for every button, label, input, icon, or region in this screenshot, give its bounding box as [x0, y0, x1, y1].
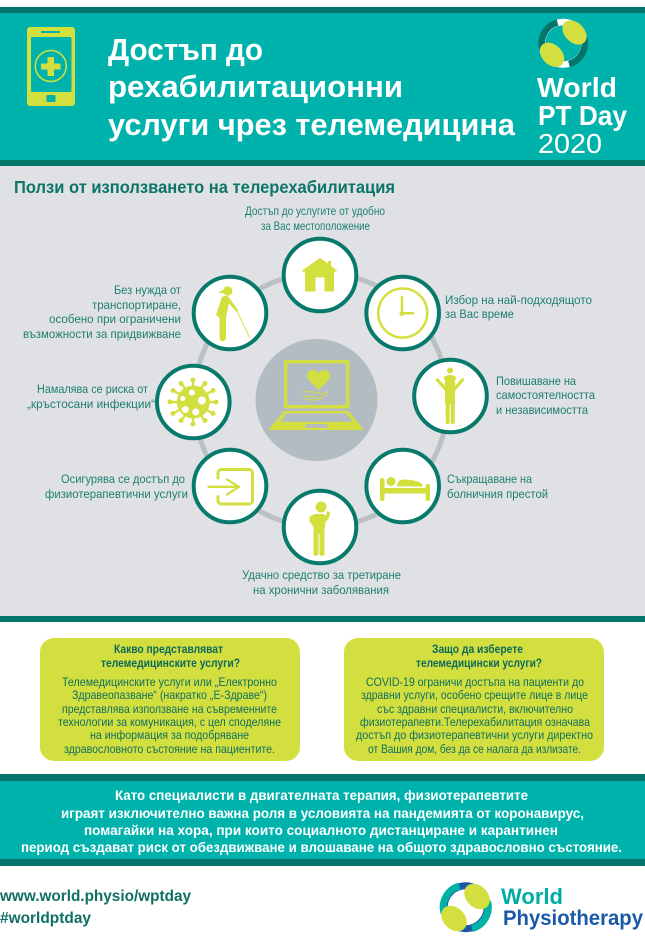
label: accessible location: Достъп до услугите от удобно: [245, 204, 385, 218]
callout: what are telehealth services: [40, 638, 300, 761]
banner: role of physiotherapists: [0, 774, 645, 866]
callout: what are telehealth services: на информация за подобряване: [90, 728, 249, 742]
label: access to physiotherapy: физиотерапевтични услуги: [45, 487, 188, 501]
label: no transport: възможности за придвижване: [23, 327, 181, 341]
icon circle: parent carrying child: [414, 360, 487, 432]
logo: World PT Day 2020: World: [537, 72, 617, 103]
title: услуги чрез телемедицина: [108, 107, 516, 142]
callout: why choose telehealth services: здравни услуги, особено срещите лице в лице: [361, 688, 588, 702]
connecting ring: [194, 273, 448, 527]
callout: why choose telehealth services: физиотерапевти.Телерехабилитация означава: [360, 715, 590, 729]
callout: why choose telehealth services: COVID-19 ограничи достъпа на пациенти до: [366, 675, 584, 689]
logo: World PT Day 2020: PT Day: [538, 100, 627, 131]
header band: [0, 7, 645, 166]
label: shorter hospital stay: [447, 472, 548, 501]
callout: what are telehealth services: Здравеопазване“ (накратко „Е-Здраве“): [72, 688, 267, 702]
icon circle: person thinking: [284, 491, 356, 563]
label: no transport: Без нужда от: [114, 283, 181, 297]
callout: why choose telehealth services: достъп до физиотерапевтични услуги директно: [356, 728, 593, 742]
label: no transport: транспортиране,: [92, 298, 181, 312]
banner: role of physiotherapists: Като специалисти в двигателната терапия, физиотерапевтите: [115, 788, 528, 803]
callout: what are telehealth services: Телемедицинските услуги или „Електронно: [62, 675, 277, 689]
label: best time: Избор на най-подходящото: [445, 293, 592, 307]
logo: World Physiotherapy: World: [501, 884, 563, 909]
icon: laptop with heart in hand: [256, 339, 378, 461]
footer links: [0, 888, 191, 927]
callout: what are telehealth services: Какво представляват: [114, 642, 223, 656]
icon circle: home: [284, 239, 356, 311]
logo: World Physiotherapy: Physiotherapy: [503, 907, 643, 930]
footer links: #worldptday: [0, 910, 91, 927]
logo: World PT Day 2020: [535, 16, 627, 159]
callout: what are telehealth services: телемедицинските услуги?: [101, 656, 240, 670]
label: best time: [445, 293, 592, 321]
label: accessible location: [245, 204, 385, 233]
label: shorter hospital stay: болничния престой: [447, 487, 548, 501]
label: chronic conditions: Удачно средство за третиране: [242, 568, 401, 582]
label: no transport: особено при ограничени: [49, 312, 181, 326]
logo: World PT Day 2020: 2020: [538, 128, 602, 159]
icon circle: elderly person with cane: [194, 277, 266, 349]
label: chronic conditions: на хронични заболявания: [253, 583, 389, 597]
icon circle: virus: [157, 366, 230, 438]
icon circle: door entry with arrow: [194, 450, 266, 522]
callout: what are telehealth services: представлява използване на съвременните: [62, 702, 277, 716]
callout: why choose telehealth services: от Вашия дом, без да се налага да излизате.: [368, 742, 581, 756]
banner: role of physiotherapists: помагайки на хора, при които социалното дистанциране и карантинен: [84, 823, 558, 838]
label: independence: самостоятелността: [496, 388, 595, 402]
callout: what are telehealth services: технологии за комуникация, с цел споделяне: [58, 715, 281, 729]
callout: why choose telehealth services: Защо да изберете: [432, 642, 523, 656]
icon circle: hospital bed: [366, 450, 439, 522]
heading: Ползи от използването на телерехабилитация: [14, 177, 395, 197]
label: access to physiotherapy: Осигурява се достъп до: [61, 472, 185, 486]
label: cross infection: Намалява се риска от: [37, 382, 148, 396]
banner: role of physiotherapists: играят изключително важна роля в условията на пандемията от коронавирус,: [61, 806, 584, 821]
label: access to physiotherapy: [45, 472, 188, 501]
callout: why choose telehealth services: със здравни специалисти, включително: [377, 702, 573, 716]
callout: why choose telehealth services: [344, 638, 604, 761]
label: no transport: [23, 283, 181, 341]
label: cross infection: „кръстосани инфекции“: [27, 397, 155, 411]
title: [108, 32, 516, 142]
label: independence: Повишаване на: [496, 374, 576, 388]
label: independence: [496, 374, 595, 417]
panel: benefits of telerehabilitation: [0, 166, 645, 622]
logo: World Physiotherapy: [436, 879, 643, 936]
label: chronic conditions: [242, 568, 401, 597]
callout: why choose telehealth services: телемедицински услуги?: [416, 656, 542, 670]
title: Достъп до: [108, 32, 263, 67]
callout: what are telehealth services: здравословното състояние на пациентите.: [64, 742, 275, 756]
label: best time: за Вас време: [445, 307, 514, 321]
icon: smartphone with medical cross: [27, 27, 75, 106]
label: independence: и независимостта: [496, 403, 588, 417]
icon circle: clock: [366, 277, 439, 349]
title: рехабилитационни: [108, 69, 403, 104]
footer links: www.world.physio/wptday: [0, 888, 191, 905]
label: shorter hospital stay: Съкращаване на: [447, 472, 532, 486]
label: accessible location: за Вас местоположение: [261, 219, 370, 233]
label: cross infection: [27, 382, 155, 411]
banner: role of physiotherapists: период създават риск от обездвижване и влошаване на общото здравословно състояние.: [21, 840, 622, 855]
